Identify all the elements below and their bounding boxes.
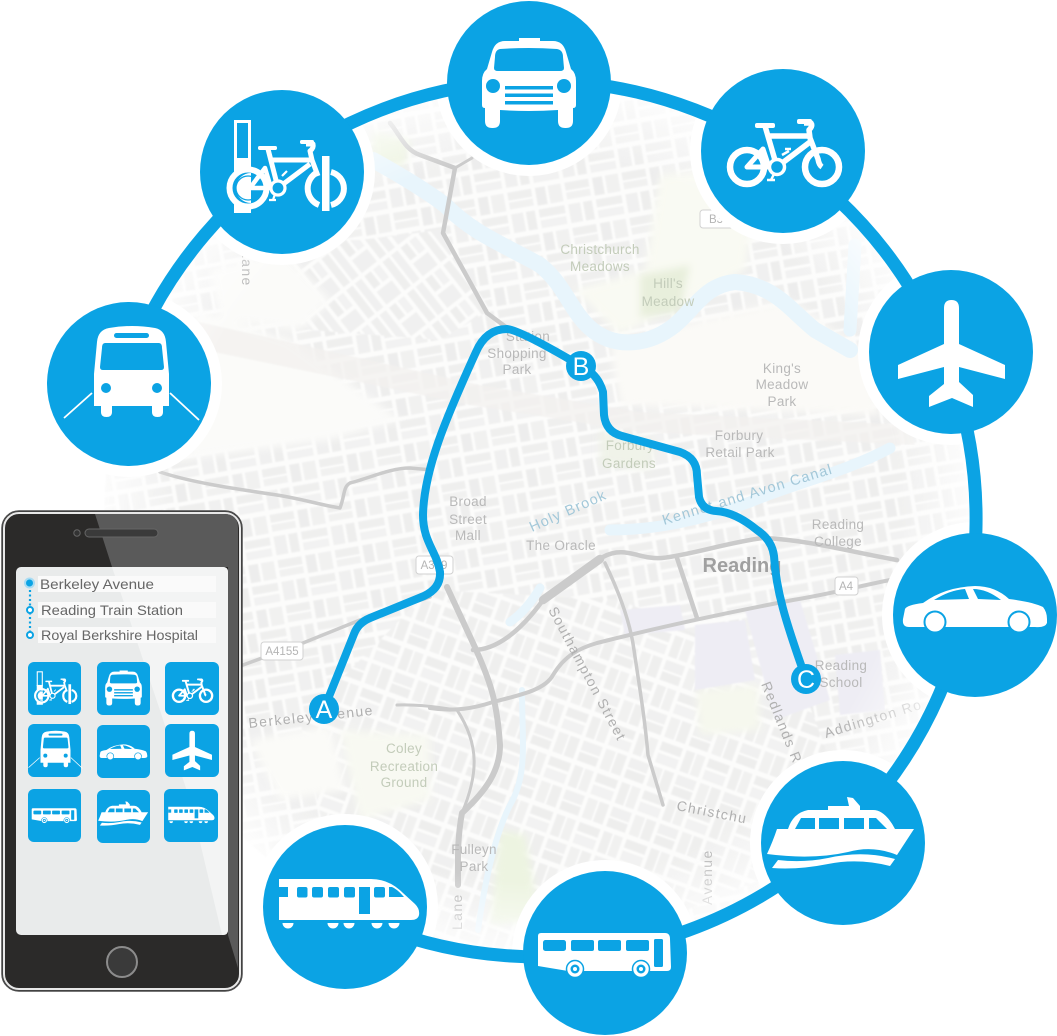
route line [324, 329, 806, 709]
label: Kennet and Avon Canal: Kennet and Avon Canal [660, 462, 835, 529]
label: Station Shopping Park: Shopping [487, 346, 547, 361]
map of Reading [128, 120, 948, 933]
camera [74, 530, 80, 536]
road shield: A4: A4 [839, 581, 854, 593]
pin A: A [316, 696, 333, 724]
label: Forbury Gardens: Gardens [602, 456, 656, 471]
label: Christchurch Meadows: Christchurch [560, 242, 640, 257]
label: Avenue: Avenue [699, 849, 715, 905]
label: Redlands Road: Redlands R [758, 679, 806, 766]
label: Broad Street Mall: Mall [455, 528, 481, 543]
stop: Royal Berkshire Hospital: Royal Berkshire Hospital [41, 627, 198, 643]
home button [107, 947, 137, 977]
pin A [309, 694, 339, 724]
label: Forbury Retail Park: Forbury [715, 428, 763, 443]
label: Reading School: School [819, 675, 863, 690]
label: Southampton Street: Southampton Street [545, 604, 630, 744]
road shield: A4 [835, 577, 858, 595]
phone body [2, 511, 242, 991]
label: Fulleyn Park: Park [460, 859, 488, 874]
road shield: A329: A329 [421, 560, 447, 572]
label: Addington Road: Addington Ro [822, 696, 924, 741]
journey list [24, 576, 216, 643]
mode circle: ferry [761, 761, 925, 925]
app icon: train [164, 789, 218, 842]
rail corridor [242, 333, 902, 443]
label: Reading: Reading [703, 555, 781, 577]
road shield: A4155: A4155 [265, 646, 299, 658]
label: Station Shopping Park: Station [506, 329, 550, 344]
label: Reading College: College [814, 534, 862, 549]
pin C [791, 664, 821, 694]
label: Reading College: Reading [812, 517, 864, 532]
map base with street blocks [128, 123, 948, 920]
road shield: A329 [416, 556, 453, 574]
label: King's Meadow Park: Park [768, 394, 796, 409]
app icon: bus lane [28, 724, 82, 777]
label: Berkeley Avenue: Berkeley Avenue [248, 702, 374, 731]
mode circle: train [263, 825, 427, 989]
label: Broad Street Mall: Broad [449, 494, 487, 509]
app icon: cycle parking [28, 662, 81, 715]
label: Coley Recreation Ground: Recreation [370, 759, 438, 774]
pin B [566, 351, 596, 381]
road shield: A4155 [261, 642, 303, 660]
mode circle: bus lane [47, 302, 211, 466]
label: Coley Recreation Ground: Coley [386, 741, 422, 756]
ring connecting transport modes [122, 81, 976, 957]
mode circle: cycle parking [200, 90, 364, 254]
place labels [239, 210, 924, 930]
label: Station Shopping Park: Park [503, 362, 531, 377]
label: Christchurch Road: Christchu [675, 797, 749, 827]
stop: Berkeley Avenue [38, 576, 216, 592]
mode circle: bus [523, 871, 687, 1035]
stop dots [24, 578, 35, 638]
pin C: C [797, 666, 815, 694]
label: Lane north-west: Lane [239, 250, 255, 287]
roads [160, 123, 897, 885]
label: Christchurch Meadows: Meadows [570, 259, 630, 274]
screen [16, 567, 228, 935]
stop: Reading Train Station: Reading Train Station [41, 602, 183, 618]
label: The Oracle: The Oracle [526, 538, 596, 553]
label: Forbury Retail Park: Retail Park [705, 445, 775, 460]
institutional areas [620, 600, 885, 720]
label: Holy Brook: Holy Brook [527, 487, 609, 536]
label: Coley Recreation Ground: Ground [381, 775, 427, 790]
app icon: car [97, 725, 150, 778]
label: King's Meadow Park: King's [763, 361, 801, 376]
mode circle: plane [869, 270, 1033, 434]
app icon: ferry [97, 790, 150, 843]
mode circle: taxi [447, 1, 611, 165]
rivers and canal [373, 160, 890, 930]
label: Broad Street Mall: Street [449, 512, 487, 527]
app icon: bicycle [165, 662, 219, 715]
app icon: taxi [97, 662, 150, 715]
label: Forbury Gardens: Forbury [606, 438, 654, 453]
speaker [85, 529, 158, 537]
label: Hill's Meadow: Meadow [642, 294, 694, 309]
app icon: bus [28, 789, 81, 842]
route A to B to C [309, 329, 821, 724]
label: Reading School: Reading [815, 658, 867, 673]
phone glare [95, 514, 238, 968]
pin B: B [573, 353, 589, 381]
label: King's Meadow Park: Meadow [756, 377, 808, 392]
app icon: plane [165, 724, 219, 777]
smartphone [2, 511, 242, 991]
label: Lane south: Lane [449, 893, 465, 930]
stop: Berkeley Avenue: Berkeley Avenue [40, 576, 154, 592]
mode circle: car [893, 533, 1057, 697]
road shield: B3: B3 [709, 214, 723, 226]
open land and parks [192, 135, 876, 922]
mode circle: bicycle [701, 69, 865, 233]
label: Hill's Meadow: Hill's [653, 276, 683, 291]
label: Fulleyn Park: Fulleyn [451, 842, 497, 857]
road shield: B3 [700, 210, 734, 228]
